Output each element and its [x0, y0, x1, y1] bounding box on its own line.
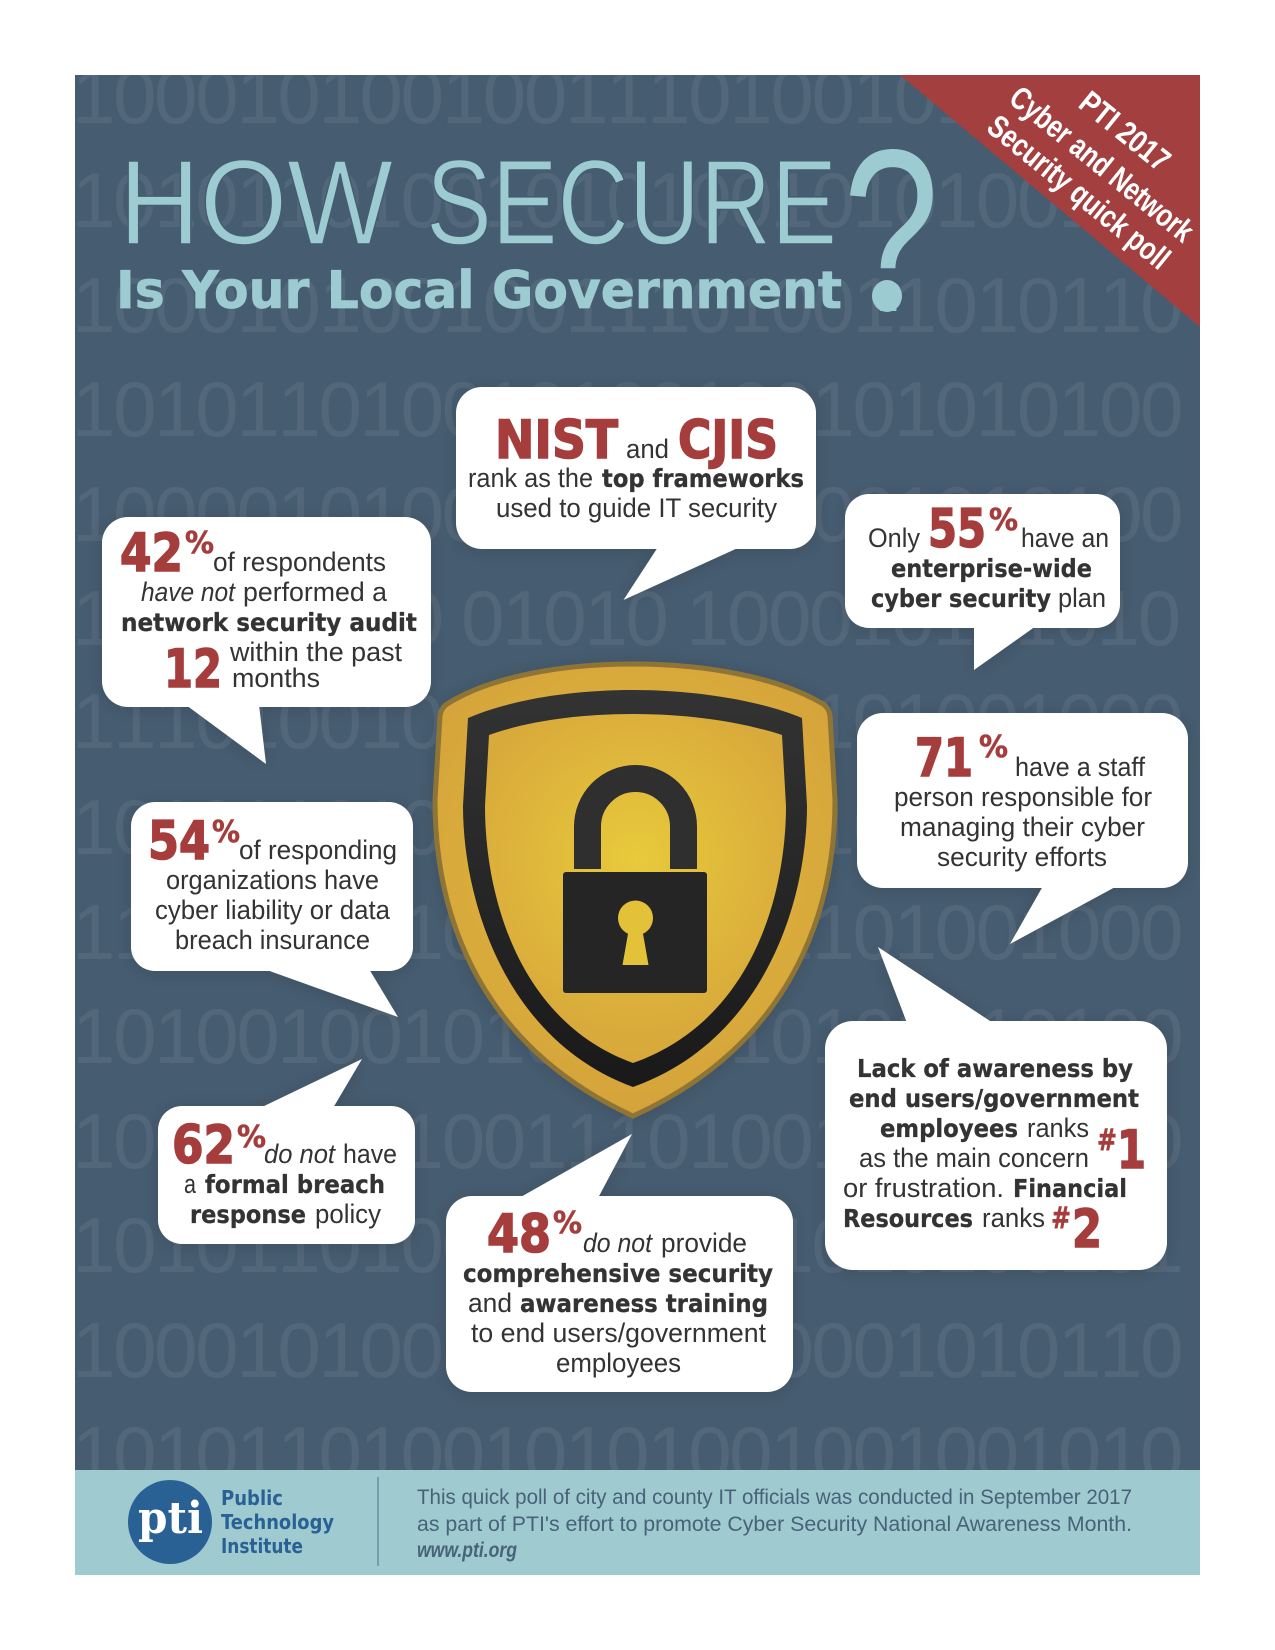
shield body [435, 664, 835, 1116]
callout: 42% no network security audit [102, 517, 431, 764]
corner ribbon: PTI 2017 poll: Security quick poll [981, 108, 1177, 276]
binary digits background pattern: 101011010010100100101010100 [72, 365, 1181, 453]
text: insurance: breach insurance [175, 925, 370, 955]
stat: NIST and CJIS [495, 410, 778, 471]
binary digits background pattern: 101011010010101001001001010 [72, 1410, 1181, 1498]
text: audit: of respondents [213, 547, 386, 577]
stat: rank number 2: # [1051, 1201, 1071, 1236]
text: lack of awareness: employees [880, 1114, 1018, 1143]
stat: 54%: % [212, 815, 240, 850]
stat: 55%: 55 [928, 499, 986, 560]
callout: 71% staff person [857, 713, 1188, 944]
shield inner dark ring [463, 690, 807, 1087]
stat: 54%: 54 [148, 811, 210, 872]
binary digits background pattern: 101011010010101001010100101 [72, 156, 1181, 244]
text: training: comprehensive security [463, 1259, 773, 1288]
text: audit: have not [141, 577, 236, 607]
binary digits background pattern: 110010101001011011101001000 [72, 888, 1181, 976]
logo: organisation name: Public [221, 1486, 283, 1510]
stat: NIST and CJIS: CJIS [678, 410, 778, 471]
callout: 54% insurance [131, 802, 413, 1017]
footer band [75, 1470, 1200, 1575]
text: top frameworks [468, 463, 804, 523]
callout: NIST and CJIS [456, 387, 816, 600]
stat: NIST and CJIS: NIST [495, 410, 618, 471]
stat: rank number 2 [1051, 1199, 1102, 1260]
bubble shape [857, 713, 1188, 944]
stat: 42%: % [185, 526, 214, 561]
padlock [563, 778, 707, 993]
binary digits background pattern: 100010100100111010011010110 [72, 261, 1181, 349]
binary digits background pattern: 100101001001110100101001010 [72, 1097, 1181, 1185]
footer note: This quick poll of city and county IT officials was conducted in September 2017 [417, 1486, 1132, 1509]
text: audit: network security audit [121, 608, 417, 637]
text: training: employees [556, 1348, 681, 1378]
logo: organisation name: Technology [221, 1510, 334, 1534]
text: staff responsibility: security efforts [937, 842, 1107, 872]
text: audit: 12 [164, 639, 222, 700]
text: audit: within the past [229, 637, 402, 667]
text: lack of awareness: ranks [982, 1203, 1045, 1233]
text: insurance: organizations have [166, 865, 379, 895]
text: lack of awareness: Resources [843, 1204, 973, 1233]
stat: 71%: % [979, 730, 1008, 765]
bubble shape [456, 387, 816, 600]
callout: 62% formal breach response [158, 1059, 415, 1244]
text: top frameworks: top frameworks [602, 464, 804, 493]
text: top frameworks: rank as the [468, 463, 593, 493]
binary digits background pattern: 100010100 01010 100010101010 [72, 574, 1179, 662]
text: enterprise-wide plan: enterprise-wide [891, 554, 1092, 583]
corner ribbon: PTI 2017 poll [900, 75, 1201, 327]
text: breach response: formal breach [205, 1170, 385, 1199]
text: lack of awareness [843, 1054, 1139, 1233]
text: insurance [155, 835, 397, 955]
text: lack of awareness: or frustration. [843, 1173, 1004, 1203]
text: lack of awareness: Lack of awareness by [857, 1054, 1133, 1083]
heading: how secure [119, 134, 837, 270]
text: enterprise-wide plan: have an [1021, 523, 1109, 553]
binary digits background pattern: 101001001010010010101010100 [72, 992, 1181, 1080]
stat: 48%: 48 [487, 1204, 551, 1265]
bubble shape [102, 517, 431, 764]
bubble shape [825, 947, 1167, 1270]
corner ribbon: PTI 2017 poll: PTI 2017 [1072, 84, 1178, 178]
text: training: provide [661, 1228, 747, 1258]
stat: 55%: % [989, 503, 1018, 538]
text: lack of awareness: as the main concern [859, 1143, 1089, 1173]
shield with padlock icon [435, 664, 835, 1116]
text: lack of awareness: ranks [1027, 1113, 1089, 1143]
bubble shape [845, 494, 1120, 670]
text: enterprise-wide plan [868, 523, 1109, 613]
stat: rank number 1: 1 [1117, 1120, 1146, 1181]
stat: 62%: % [237, 1120, 266, 1155]
text: enterprise-wide plan: Only [868, 523, 920, 553]
bubble shape [446, 1134, 793, 1392]
binary digits background pattern: 101011010101010100101001011 [72, 783, 1181, 871]
text: enterprise-wide plan: cyber security [871, 584, 1051, 613]
text: lack of awareness: end users/government [849, 1084, 1139, 1113]
footer note: www.pti.org [417, 1539, 517, 1562]
logo: organisation name [221, 1486, 334, 1558]
text: lack of awareness: Financial [1013, 1174, 1127, 1203]
binary digits background pattern: 111010010101010011101001000 [72, 677, 1181, 765]
text: breach response: a [184, 1169, 197, 1199]
stat: rank number 1: # [1097, 1123, 1117, 1158]
text: staff responsibility: have a staff [1015, 752, 1145, 782]
footer note [417, 1486, 1132, 1562]
main panel background [75, 75, 1200, 1470]
stat: rank number 1 [1097, 1120, 1146, 1181]
text: audit: months [232, 663, 320, 693]
text: training [463, 1228, 773, 1378]
text: top frameworks: used to guide IT security [496, 493, 777, 523]
text: breach response: policy [315, 1199, 381, 1229]
text: staff responsibility [894, 752, 1152, 872]
text: breach response: do not [264, 1139, 336, 1169]
text: enterprise-wide plan: plan [1058, 583, 1106, 613]
callout: lack of awareness ranks number 1 [825, 947, 1167, 1270]
text: training: and [468, 1288, 512, 1318]
text: audit [121, 547, 417, 700]
text: insurance: cyber liability or data [155, 895, 391, 925]
text: audit: performed a [243, 577, 388, 607]
heading: how secure: SECURE [426, 134, 837, 270]
logo: pti circle [128, 1480, 212, 1564]
bubble shape [158, 1059, 415, 1244]
bubble shape [131, 802, 413, 1017]
text: training: awareness training [520, 1289, 768, 1318]
callout: 55% enterprise-wide plan [845, 494, 1120, 670]
footer note: as part of PTI's effort to promote Cyber Security National Awareness Month. [417, 1513, 1132, 1536]
subheading: is your local government: Is Your Local Government [116, 261, 842, 321]
binary digits background pattern [72, 52, 1181, 1498]
text: training: do not [583, 1228, 653, 1258]
stat: 62%: 62 [172, 1115, 235, 1176]
stat: 48%: % [553, 1206, 582, 1241]
text: breach response [184, 1139, 397, 1229]
stat: 71%: 71 [915, 728, 973, 789]
logo: pti circle: pti [138, 1493, 203, 1544]
logo: organisation name: Institute [221, 1534, 303, 1558]
text: insurance: of responding [239, 835, 397, 865]
corner ribbon: PTI 2017 poll: Cyber and Network [1003, 79, 1201, 249]
binary digits background pattern: 100010100101001010001010110 [72, 1306, 1181, 1394]
text: staff responsibility: person responsible for [894, 782, 1152, 812]
text: breach response: response [190, 1200, 306, 1229]
text: training: to end users/government [471, 1318, 766, 1348]
stat: rank number 2: 2 [1072, 1199, 1102, 1260]
heading: how secure: HOW [119, 134, 393, 270]
text: breach response: have [343, 1139, 397, 1169]
binary digits background pattern: 101011010010101001010100101 [72, 1201, 1181, 1289]
binary digits background pattern: 100010100100111010010101011 [72, 52, 1181, 140]
stat: NIST and CJIS: and [626, 434, 669, 464]
text: staff responsibility: managing their cyber [900, 812, 1145, 842]
callout: 48% training [446, 1134, 793, 1392]
binary digits background pattern: 100001010010011101001010100 [72, 470, 1181, 558]
heading: large question mark: ? [843, 102, 939, 361]
stat: 42%: 42 [120, 523, 183, 584]
title [116, 102, 939, 361]
